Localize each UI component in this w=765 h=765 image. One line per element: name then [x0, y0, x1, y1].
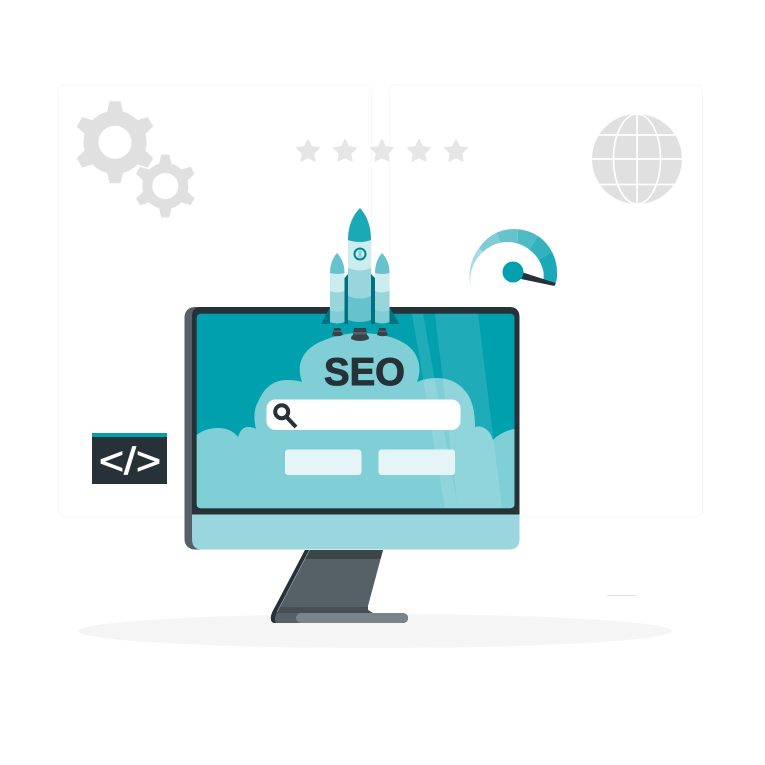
- code symbol: </>: [99, 441, 161, 483]
- screen: [197, 314, 514, 508]
- heading: SEO: SEO: [324, 351, 405, 394]
- rocket window: [354, 248, 366, 260]
- right booster: [375, 253, 390, 324]
- button: right: [378, 450, 455, 475]
- gauge needle: [521, 272, 556, 286]
- icon: magnifier: [275, 405, 296, 427]
- background panel: left: [58, 84, 372, 516]
- monitor bezel: [192, 307, 520, 514]
- floor shadow: [78, 614, 672, 648]
- rocket engines: [332, 328, 388, 341]
- monitor stand: [271, 550, 408, 623]
- cloud with SEO: [197, 333, 514, 508]
- icon: speed gauge: [470, 229, 557, 287]
- button: left: [285, 450, 362, 475]
- background panel: right: [390, 84, 702, 516]
- screen reflection: [412, 314, 502, 508]
- rocket: [321, 208, 400, 341]
- icon: large gear: [75, 101, 155, 183]
- rocket main body: [348, 208, 371, 322]
- monitor: [184, 307, 520, 550]
- search bar: [266, 400, 460, 430]
- monitor chin: [192, 500, 520, 550]
- monitor side edge: [184, 307, 244, 550]
- rocket fins: [321, 274, 400, 324]
- icon: small gear: [135, 154, 196, 218]
- code window: [92, 433, 167, 484]
- small floor line: [607, 595, 636, 596]
- left booster: [330, 253, 344, 324]
- stand base: [296, 613, 408, 623]
- icon: globe: [592, 114, 682, 204]
- rating stars: [297, 140, 467, 161]
- gauge hub: [502, 262, 524, 282]
